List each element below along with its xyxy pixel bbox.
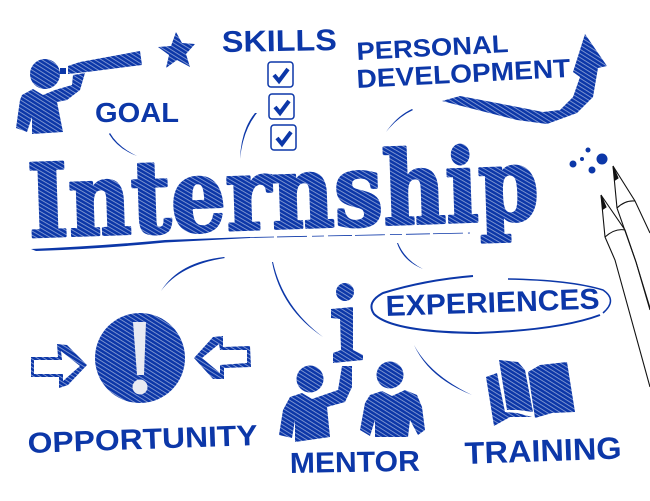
icon: pencils (601, 166, 650, 387)
label: personal development: DEVELOPMENT (356, 53, 571, 94)
label: goal: GOAL (95, 97, 179, 128)
icon: left arrow (194, 336, 251, 379)
label: personal development: PERSONAL (356, 30, 509, 66)
icon: star (158, 32, 195, 68)
decorative dots icon (570, 148, 608, 174)
title: Internship: Internship (26, 124, 541, 261)
icon: exclamation circle (95, 313, 185, 403)
arrow: personal growth (442, 34, 607, 124)
icon: man with telescope (16, 51, 142, 134)
icon: open book (486, 360, 575, 426)
label: experiences in ellipse (371, 276, 610, 333)
label: skills: SKILLS (222, 24, 337, 59)
label: training: TRAINING (464, 431, 622, 471)
connector lines (109, 109, 472, 395)
label: opportunity: OPPORTUNITY (27, 420, 258, 460)
label: personal development (356, 30, 571, 94)
icon: checkboxes (268, 62, 296, 150)
label: mentor: MENTOR (290, 446, 420, 480)
icon: mentor figure raising hand (279, 366, 352, 442)
icon: mentee figure (360, 362, 425, 437)
label: experiences in ellipse: EXPERIENCES (385, 284, 600, 323)
icon: right arrow (31, 344, 87, 388)
icon: information i (331, 283, 363, 363)
